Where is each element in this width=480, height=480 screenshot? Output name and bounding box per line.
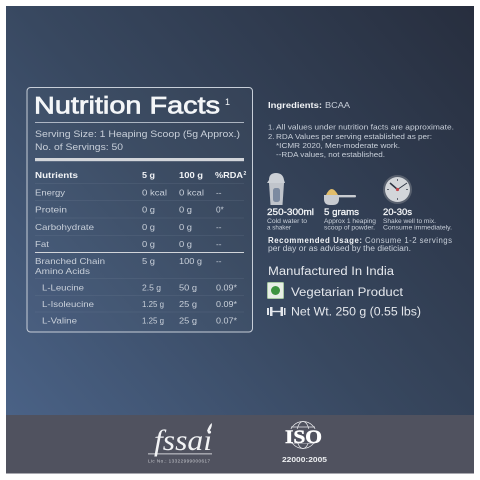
row: protein: 0*: [216, 206, 225, 214]
vegetarian product: Vegetarian Product: [291, 287, 404, 299]
row: branched chain amino acids: Amino Acids: [35, 267, 90, 276]
row: l-valine: 25 g: [179, 316, 198, 326]
row: l-leucine: 50 g: [179, 284, 198, 292]
row: l-valine: L-Valine: [42, 316, 78, 326]
footnotes: All values under nutrition facts are approximate.: [276, 122, 454, 132]
usage step: scoop: [324, 207, 377, 232]
row: carbohydrate: 0 g: [179, 223, 192, 232]
usage step: scoop: Approx 1 heaping: [324, 218, 377, 225]
row: energy: [35, 188, 222, 198]
row: l-leucine: L-Leucine: [42, 284, 85, 292]
logo: iso: [282, 422, 327, 464]
usage step: water: 250-300ml: [267, 207, 314, 218]
row: energy: --: [216, 188, 222, 198]
table header: 100 g: [179, 171, 203, 180]
icon: dumbbell: [267, 307, 286, 316]
heading: nutrition facts: 1: [225, 97, 230, 107]
serving info: No. of Servings: 50: [35, 142, 123, 153]
row: l-leucine: 0.09*: [216, 284, 238, 292]
usage step: scoop: 5 grams: [324, 207, 359, 218]
row: l-valine: 1.25 g: [142, 316, 164, 326]
row: l-leucine: 2.5 g: [142, 284, 161, 292]
table header: Nutrients: [35, 171, 79, 180]
row: l-isoleucine: 25 g: [179, 300, 198, 309]
net weight: Net Wt. 250 g (0.55 lbs): [291, 306, 421, 318]
logo: fssai: Lic No.: 13322999000617: [148, 458, 210, 464]
row: branched chain amino acids: Branched Chain: [35, 257, 106, 266]
usage step: water: Cold water to: [267, 218, 308, 225]
serving info: [35, 129, 240, 153]
row: fat: --: [216, 240, 222, 249]
row: carbohydrate: --: [216, 223, 222, 232]
row: branched chain amino acids: --: [216, 257, 222, 266]
row: l-isoleucine: L-Isoleucine: [42, 300, 95, 309]
ingredients: Ingredients:: [268, 100, 322, 110]
serving info: Serving Size: 1 Heaping Scoop (5g Approx.): [35, 129, 240, 140]
usage step: shake: [383, 207, 452, 232]
row: l-isoleucine: 1.25 g: [142, 300, 164, 309]
row: protein: Protein: [35, 206, 68, 214]
row: protein: [35, 206, 225, 214]
usage step: shake: 20-30s: [383, 207, 412, 218]
table header: [35, 171, 246, 180]
heading: nutrition facts: Nutrition Facts: [34, 92, 220, 120]
vegetarian product: [268, 282, 404, 299]
usage step: shake: Shake well to mix.: [383, 218, 436, 225]
icon: shaker bottle: [267, 173, 285, 205]
recommended usage: Recommended Usage:: [268, 236, 362, 245]
row: protein: 0 g: [179, 206, 192, 214]
table header: %RDA: [215, 171, 243, 180]
row: carbohydrate: [35, 223, 222, 232]
row: l-valine: [42, 316, 238, 326]
row: l-valine: 0.07*: [216, 316, 238, 326]
ingredients: BCAA: [325, 100, 350, 110]
recommended usage: [268, 236, 452, 253]
footnotes: 2.: [268, 132, 274, 141]
footer band: [6, 415, 474, 474]
row: branched chain amino acids: [35, 257, 222, 276]
icon: vegetarian mark: [268, 282, 284, 298]
row: energy: 0 kcal: [179, 188, 204, 198]
recommended usage: per day or as advised by the dietician.: [268, 244, 411, 253]
usage step: scoop: scoop of powder.: [324, 224, 375, 232]
usage step: water: [267, 207, 314, 232]
logo: iso: 22000:2005: [282, 455, 327, 464]
manufactured in india: Manufactured In India: [268, 266, 395, 278]
row: l-isoleucine: [42, 300, 238, 309]
row: carbohydrate: 0 g: [142, 223, 155, 232]
table header: 2: [244, 171, 246, 177]
row: protein: 0 g: [142, 206, 155, 214]
row: branched chain amino acids: 5 g: [142, 257, 155, 266]
row: fat: [35, 240, 222, 249]
row: fat: 0 g: [142, 240, 155, 249]
footnotes: --RDA values, not established.: [276, 150, 385, 159]
footnotes: 1.: [268, 122, 274, 132]
icon: clock: [383, 175, 412, 204]
row: fat: 0 g: [179, 240, 192, 249]
logo: fssai: fssai: [154, 424, 212, 457]
row: branched chain amino acids: 100 g: [179, 257, 202, 266]
usage step: shake: Consume immediately.: [383, 224, 452, 232]
ingredients: [268, 100, 350, 110]
table header: 5 g: [142, 171, 155, 180]
footnotes: *ICMR 2020, Men-moderate work.: [276, 141, 400, 150]
row: energy: Energy: [35, 188, 66, 198]
row: energy: 0 kcal: [142, 188, 167, 198]
usage step: water: a shaker: [267, 224, 291, 232]
footnotes: RDA Values per serving established as per:: [276, 132, 432, 141]
row: l-isoleucine: 0.09*: [216, 300, 238, 309]
logo: iso: ISO: [285, 427, 322, 448]
footnotes: [268, 122, 454, 159]
row: fat: Fat: [35, 240, 50, 249]
icon: scoop: [324, 189, 356, 205]
row: l-leucine: [42, 284, 238, 292]
recommended usage: Consume 1-2 servings: [365, 236, 452, 245]
row: carbohydrate: Carbohydrate: [35, 223, 95, 232]
panel: nutrition facts: [27, 88, 252, 332]
